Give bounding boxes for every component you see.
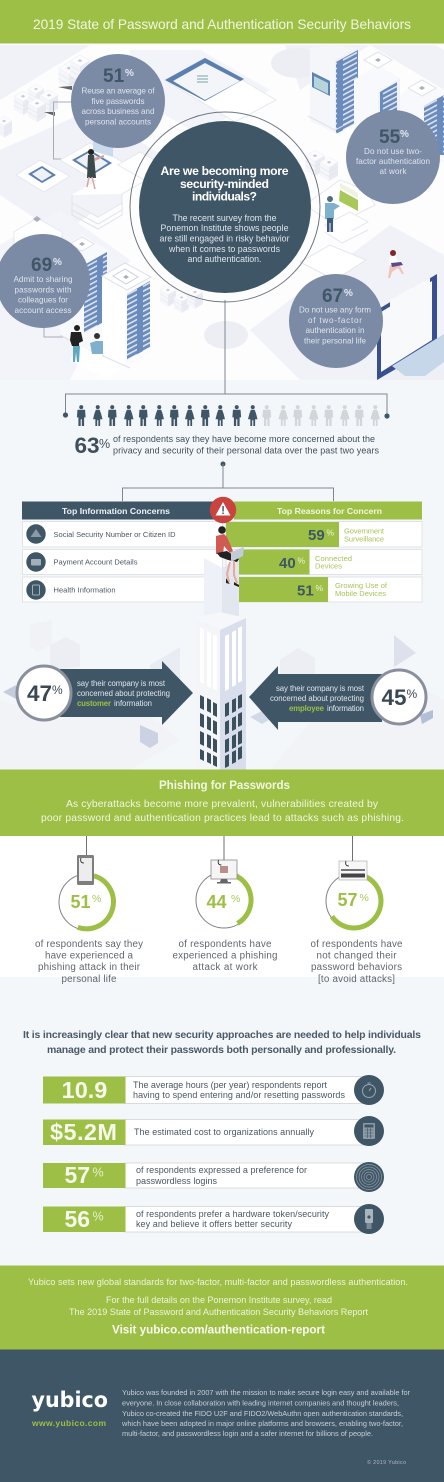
footer xyxy=(0,1350,444,1482)
bar: connected devices 40 percent: Connected xyxy=(315,554,352,563)
stat row: 56 percent hardware key: 56 xyxy=(64,1206,90,1232)
bar: mobile devices 51 percent: % xyxy=(316,583,324,593)
arrow callout: 45 percent employee: employee xyxy=(289,704,325,713)
banner: call to action: The 2019 State of Password and Authentication Security Behaviors Report xyxy=(69,1307,368,1317)
stat row: 10.9 hours: The average hours (per year) respondents report xyxy=(133,1080,327,1090)
bar: connected devices 40 percent: 40 xyxy=(279,555,296,572)
person: woman with laptop on tower xyxy=(216,526,244,587)
bar: government surveillance 59 percent: Surveillance xyxy=(344,534,384,544)
donut: 51 percent personal life: personal life xyxy=(62,974,117,985)
donut: 51 percent personal life xyxy=(35,836,143,985)
text block: about Yubico xyxy=(121,1388,411,1438)
row: payment account details xyxy=(22,550,222,574)
arrow callout: 45 percent employee: say their company is most xyxy=(276,684,365,693)
donut: 44 percent at work: % xyxy=(231,893,240,905)
stat row: 56 percent hardware key xyxy=(43,1204,384,1234)
banner: phishing for passwords: Phishing for Passwords xyxy=(159,779,290,792)
central question circle: Ponemon Institute shows people xyxy=(160,223,289,233)
text block: about Yubico: Yubico co-created the FIDO U2F and FIDO2/WebAuthn open authentication standards, xyxy=(122,1409,403,1418)
heading: new security approaches: It is increasingly clear that new security approaches are needed to help individuals xyxy=(23,1029,421,1041)
arrow callout: 47 percent customer: 47 xyxy=(27,681,52,706)
person: using tablet xyxy=(87,136,113,189)
central question circle: The recent survey from the xyxy=(172,213,277,223)
panel: top reasons for concern xyxy=(226,502,422,602)
icon: login card on hook xyxy=(339,861,367,880)
stat row: 56 percent hardware key: % xyxy=(92,1210,104,1224)
donut: 44 percent at work: experienced a phishing xyxy=(172,950,278,962)
arrow callout: 47 percent customer: concerned about protecting xyxy=(77,689,170,698)
person: sitting with laptop xyxy=(388,250,404,278)
logo: yubico: yubico xyxy=(32,1388,108,1413)
icon: monitor on hook xyxy=(211,860,237,884)
copyright: © 2019 Yubico xyxy=(367,1459,406,1466)
title banner: 2019 State of Password and Authentication Security Behaviors xyxy=(33,17,411,32)
panel: top reasons for concern: Top Reasons for Concern xyxy=(277,506,382,516)
text block: about Yubico: Yubico was founded in 2007 with the mission to make secure login easy and available for xyxy=(122,1388,411,1397)
connector: statistic to tables xyxy=(122,462,334,501)
donut: 51 percent personal life: 51 xyxy=(70,892,91,912)
arrow callout: 45 percent employee xyxy=(249,666,426,730)
bubble: 69%: % xyxy=(53,257,62,268)
bar: government surveillance 59 percent: % xyxy=(326,528,334,538)
stat row: 57 percent passwordless: % xyxy=(92,1166,104,1180)
person: at server xyxy=(325,196,340,232)
donut: 44 percent at work: of respondents have xyxy=(178,939,272,950)
stat row: 57 percent passwordless: passwordless logins xyxy=(136,1176,218,1186)
banner: call to action: Visit yubico.com/authentication-report xyxy=(112,1324,325,1336)
arrow callout: 47 percent customer: say their company is most xyxy=(77,679,166,688)
bubble: 67%: Do not use any form xyxy=(299,306,371,314)
stat row: 10.9 hours xyxy=(43,1075,384,1105)
donut: 51 percent personal life: of respondents say they xyxy=(35,939,143,950)
bubble: 51% xyxy=(71,54,165,148)
donut: 51 percent personal life: have experienced a xyxy=(45,950,134,962)
row: social security number xyxy=(22,522,222,547)
arrow callout: 47 percent customer: information xyxy=(114,699,152,708)
arrow callout: 47 percent customer: customer xyxy=(77,699,111,708)
heading: new security approaches xyxy=(23,1029,421,1056)
bubble: 55% xyxy=(346,110,440,204)
title banner xyxy=(0,0,444,44)
platforms: left and centre xyxy=(16,143,175,229)
bubble: 67%: of two-factor xyxy=(308,316,362,325)
text block: about Yubico: which have been adopted in major online platforms and browsers, enabling two-factor, xyxy=(121,1419,403,1428)
stat row: 10.9 hours: having to spend entering and/or resetting passwords xyxy=(133,1090,346,1100)
stat row: 56 percent hardware key: key and believe it offers better security xyxy=(136,1219,292,1229)
statistic: 63 percent: of respondents say they have become more concerned about the xyxy=(113,434,375,444)
bar: government surveillance 59 percent xyxy=(226,522,422,547)
bubble: 69%: colleagues for xyxy=(18,296,68,304)
bubble: 67% xyxy=(289,274,383,368)
bubble: 67%: their personal life xyxy=(304,336,366,346)
bubble: 51%: 51 xyxy=(103,66,125,87)
row: social security number: Social Security Number or Citizen ID xyxy=(54,530,176,539)
panel: top information concerns xyxy=(22,502,222,602)
bubble: 51%: across business and xyxy=(82,107,154,116)
row: health information xyxy=(22,577,222,602)
text block: about Yubico: multi-factor, and passwordless login and a safer internet for billions of people. xyxy=(122,1429,373,1438)
row: payment account details: Payment Account Details xyxy=(54,558,138,566)
stat row: 57 percent passwordless: 57 xyxy=(64,1162,90,1188)
laptop xyxy=(377,274,444,380)
server stacks: top left xyxy=(0,55,90,138)
central question circle: individuals? xyxy=(192,190,257,204)
platform: top centre xyxy=(165,58,276,122)
stat row: 5.2M cost: The estimated cost to organizations annually xyxy=(134,1127,314,1137)
banner: phishing for passwords: poor password and authentication practices lead to attacks such as phishing. xyxy=(41,813,404,824)
logo: yubico: www.yubico.com xyxy=(31,1418,106,1428)
pictogram row: 63 percent of respondents xyxy=(63,405,390,426)
bubble: 67%: authentication in xyxy=(306,326,364,335)
bubble: 69% xyxy=(0,234,90,328)
banner: phishing for passwords xyxy=(0,770,444,836)
icon: calculator xyxy=(354,1116,384,1146)
icon: security key xyxy=(354,1204,384,1234)
central question circle: when it comes to passwords xyxy=(168,244,281,254)
people: handshake xyxy=(70,325,103,373)
heading: new security approaches: manage and protect their passwords both personally and professionally. xyxy=(47,1044,396,1056)
arrow callout: 45 percent employee: concerned about protecting xyxy=(270,694,364,703)
arrow callout: 45 percent employee: information xyxy=(327,704,364,713)
donut: 57 percent behaviors unchanged: 57 xyxy=(338,890,358,910)
central question circle: Are we becoming more xyxy=(160,164,289,178)
bubble: 55%: % xyxy=(400,129,409,140)
arrow callout: 47 percent customer xyxy=(17,661,193,725)
connector: centre circle to people row xyxy=(66,300,387,415)
stat row: 5.2M cost xyxy=(43,1116,384,1146)
statistic: 63 percent xyxy=(74,433,380,458)
bubble: 55%: 55 xyxy=(379,127,401,148)
central question circle xyxy=(130,112,320,302)
bubble: 69%: passwords with xyxy=(14,286,72,294)
bubble: 69%: Admit to sharing xyxy=(14,275,72,284)
bar: connected devices 40 percent xyxy=(226,550,422,574)
banner: call to action xyxy=(0,1266,444,1350)
text block: about Yubico: everyone. In close collaboration with leading internet companies and thought leaders, xyxy=(122,1398,399,1408)
panel: phishing section background xyxy=(0,836,444,977)
stat row: 56 percent hardware key: of respondents prefer a hardware token/security xyxy=(136,1209,330,1219)
donut: 57 percent behaviors unchanged: not changed their xyxy=(316,950,397,962)
central question circle: are still engaged in risky behavior xyxy=(160,234,290,244)
donut: 51 percent personal life: phishing attack in their xyxy=(38,962,141,973)
bubble: 51%: personal accounts xyxy=(85,118,151,126)
server towers: top right xyxy=(308,45,444,162)
donut: 44 percent at work xyxy=(172,836,278,973)
server towers: bottom left xyxy=(14,216,203,378)
icon: phone on hook xyxy=(77,855,94,885)
statistic: 63 percent: % xyxy=(99,437,110,451)
donut: 57 percent behaviors unchanged: [to avoid attacks] xyxy=(318,974,395,985)
donut: 51 percent personal life: % xyxy=(92,893,101,905)
donut: 57 percent behaviors unchanged: of respondents have xyxy=(310,939,403,950)
donut: 57 percent behaviors unchanged: password behaviors xyxy=(311,962,402,973)
banner: phishing for passwords: As cyberattacks become more prevalent, vulnerabilities created by xyxy=(66,799,379,810)
statistic: 63 percent: 63 xyxy=(74,433,100,458)
stat row: 10.9 hours: 10.9 xyxy=(62,1077,107,1103)
donut: 57 percent behaviors unchanged: % xyxy=(360,892,369,904)
banner: call to action: Yubico sets new global standards for two-factor, multi-factor and passwordless authentication. xyxy=(28,1277,408,1287)
warning icon xyxy=(210,497,236,523)
icon: stopwatch xyxy=(354,1075,384,1105)
row: health information: Health Information xyxy=(54,586,116,594)
stat row: 57 percent passwordless: of respondents expressed a preference for xyxy=(136,1165,307,1175)
arrow callout: 45 percent employee: % xyxy=(406,687,418,701)
bubble: 69%: account access xyxy=(14,306,72,315)
logo: yubico xyxy=(31,1388,108,1428)
bar: mobile devices 51 percent: 51 xyxy=(297,582,314,600)
bar: mobile devices 51 percent: Mobile Devices xyxy=(335,589,386,598)
statistic: 63 percent: privacy and security of their personal data over the past two years xyxy=(113,446,380,456)
city background xyxy=(0,620,444,770)
bubble: 55%: at work xyxy=(380,167,407,176)
central question circle: security-minded xyxy=(180,177,269,191)
bubble: 51%: Reuse an average of xyxy=(82,86,155,96)
donut: 44 percent at work: attack at work xyxy=(192,962,258,973)
connector lines to bubbles xyxy=(44,102,350,337)
bubble: 55%: Do not use two- xyxy=(364,147,422,156)
bar: mobile devices 51 percent xyxy=(226,577,422,602)
arrow callout: 45 percent employee: 45 xyxy=(382,685,407,710)
bubble: 67%: % xyxy=(344,288,353,299)
bar: mobile devices 51 percent: Growing Use of xyxy=(335,581,388,590)
bubble: 51%: five passwords xyxy=(92,97,144,106)
panel: top information concerns: Top Information Concerns xyxy=(62,506,170,516)
tower illustration xyxy=(195,558,246,770)
bar: connected devices 40 percent: % xyxy=(298,556,306,566)
bubble: 55%: factor authentication xyxy=(356,157,430,166)
icon: fingerprint xyxy=(354,1162,384,1192)
stat row: 5.2M cost: $5.2M xyxy=(50,1119,117,1145)
bar: government surveillance 59 percent: 59 xyxy=(308,527,325,544)
central question circle: and authentication. xyxy=(188,254,262,264)
bubble: 69%: 69 xyxy=(31,255,52,276)
platforms: right xyxy=(300,150,375,280)
bubble: 51%: % xyxy=(125,68,134,79)
donut: 44 percent at work: 44 xyxy=(206,892,227,912)
bar: connected devices 40 percent: Devices xyxy=(315,562,342,570)
stat row: 57 percent passwordless xyxy=(43,1162,384,1192)
bar: government surveillance 59 percent: Government xyxy=(344,526,385,536)
arrow callout: 47 percent customer: % xyxy=(52,683,63,697)
bubble: 67%: 67 xyxy=(322,286,343,307)
hero illustration: isometric data centre xyxy=(0,44,444,380)
banner: call to action: For the full details on the Ponemon Institute survey, read xyxy=(106,1295,332,1305)
donut: 57 percent behaviors unchanged xyxy=(310,836,403,985)
